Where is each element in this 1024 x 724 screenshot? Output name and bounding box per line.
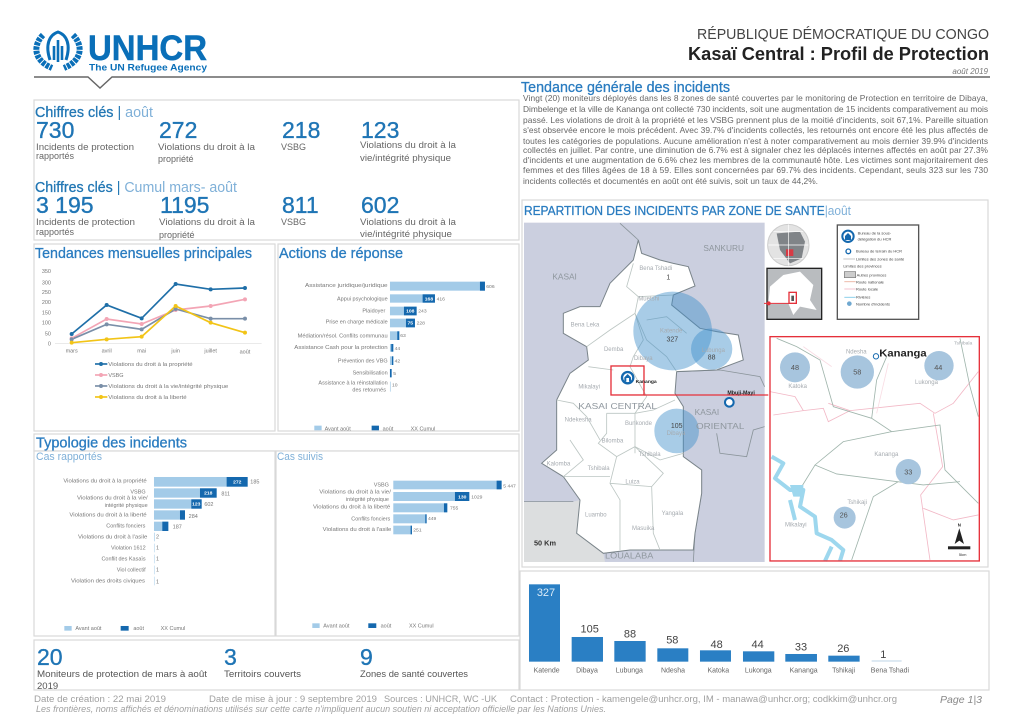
line chart: 50 bbox=[45, 331, 51, 337]
panel: incidents map bbox=[522, 200, 988, 567]
logo: UNHCR bbox=[36, 29, 208, 74]
map place labels: Luiza bbox=[625, 480, 640, 486]
bar chart: reported cases: Violation des droits civiques bbox=[71, 579, 145, 585]
icon: Mbuji-Mayi field office bbox=[725, 398, 734, 407]
bar chart: reported cases: 1 bbox=[156, 568, 159, 574]
stat: cumulative VSBG: VSBG bbox=[281, 217, 306, 227]
stat: life violations: Violations du droit à la bbox=[360, 140, 456, 150]
map legend: Autres provinces bbox=[857, 272, 886, 277]
stat: cumulative incidents bbox=[36, 192, 135, 237]
header title block: Kasaï Central : Profil de Protection bbox=[688, 43, 989, 64]
bar chart: followed cases: Violations du droit à l'asile bbox=[323, 527, 391, 533]
bar chart: response actions: 63 bbox=[400, 333, 406, 339]
bar chart: reported cases: 1 bbox=[156, 557, 159, 563]
stat: monitors bbox=[37, 644, 207, 692]
map place labels: Dibaya bbox=[667, 431, 686, 437]
stat: life violations: vie/intégrité physique bbox=[360, 153, 451, 163]
bar categories: Katende bbox=[534, 667, 560, 674]
bar chart: followed cases: 755 bbox=[450, 506, 459, 512]
stat: monitors: Moniteurs de protection de mars à août bbox=[37, 669, 207, 680]
stat: incidents: rapportés bbox=[36, 151, 75, 161]
bar chart: reported cases: Violations du droit à l'asile bbox=[78, 535, 147, 541]
map place labels: Katende bbox=[660, 328, 683, 334]
bar chart: response actions bbox=[294, 282, 495, 394]
bar chart: response actions: 44 bbox=[395, 346, 400, 352]
legend: response actions: août bbox=[383, 426, 394, 432]
stat: cumulative property: Violations du droit à la bbox=[159, 217, 255, 227]
map legend: Route locale bbox=[856, 287, 879, 292]
inset incident circles bbox=[780, 351, 954, 529]
page number: Page 1|3 bbox=[940, 694, 982, 706]
bar chart: reported cases: Viol collectif bbox=[117, 567, 146, 573]
incident counts: 88 bbox=[708, 355, 716, 362]
bar chart: followed cases: 130 bbox=[458, 494, 467, 500]
general trend paragraph: d'incidents et une augmentation de 6.6% chez les membres de la communauté hôte. Les victimes sont majoritairement des bbox=[523, 155, 988, 165]
map province labels: KASAI bbox=[695, 407, 719, 417]
map place labels: Lubunga bbox=[702, 348, 726, 354]
legend: reported cases: XX Cumul bbox=[161, 626, 185, 632]
general trend paragraph: Dimbelenge et la ville de Kananga ont collecté 730 incidents, soit une augmentation de 15 incidents comparativement au mois bbox=[523, 104, 988, 114]
heading: map: REPARTITION DES INCIDENTS PAR ZONE DE SANTE|août bbox=[524, 203, 851, 218]
legend: reported cases bbox=[64, 626, 185, 632]
bar chart: reported cases: 284 bbox=[189, 514, 198, 520]
stat: property violations: propriété bbox=[158, 154, 194, 164]
panel: response actions bbox=[278, 244, 519, 432]
map place labels: Kalomba bbox=[547, 461, 571, 467]
panel: incident typology bbox=[34, 434, 519, 636]
bar chart: reported cases: Conflit des Kasaïs bbox=[101, 556, 146, 562]
incident counts: 1 bbox=[666, 274, 670, 281]
general trend heading: Tendance générale des incidents bbox=[521, 79, 730, 96]
panel: key figures bbox=[34, 100, 519, 240]
bar chart: followed cases: Conflits fonciers bbox=[351, 516, 391, 522]
legend: response actions: Avant août bbox=[325, 426, 351, 432]
province: Kasaï Central bbox=[542, 240, 743, 553]
footer sources bbox=[34, 694, 897, 704]
general trend paragraph: passé. Les violations de droit à la propriété et les VSBG prennent plus de la moitié d'incidents, soit 67,1%. Pareille situation bbox=[523, 115, 988, 125]
inset counts: 48 bbox=[791, 363, 799, 372]
bar chart: response actions: Sensibilisation bbox=[353, 371, 388, 377]
header rule with pointer bbox=[34, 77, 990, 88]
inset place labels: Kananga bbox=[874, 452, 899, 458]
bar categories: Ndesha bbox=[661, 667, 685, 674]
bar values: 58 bbox=[666, 634, 678, 646]
bar categories: Bena Tshadi bbox=[871, 667, 910, 674]
heading: response actions: Actions de réponse bbox=[279, 246, 403, 262]
line chart: 200 bbox=[42, 300, 51, 306]
footer disclaimer: Les frontières, noms affichés et dénominations utilisés sur cette carte n'impliquent aucun soutien ni acceptation officielle par les Nations Unies. bbox=[36, 704, 606, 714]
bar chart: response actions: Assistance Cash pour la protection bbox=[294, 345, 388, 351]
bar chart: response actions: 606 bbox=[486, 284, 495, 290]
stat: health zones bbox=[360, 644, 468, 680]
inset counts bbox=[791, 363, 942, 520]
bar categories: Lubunga bbox=[616, 667, 643, 674]
footer sources: Date de mise à jour : 9 septembre 2019 bbox=[209, 694, 377, 704]
stat: incidents: Incidents de protection bbox=[36, 142, 134, 152]
bar chart: reported cases: 185 bbox=[250, 480, 259, 486]
stat: cumulative life: vie/intégrité physique bbox=[360, 229, 452, 239]
line chart: 300 bbox=[42, 280, 51, 286]
stat: cumulative incidents: 3 195 bbox=[36, 192, 94, 218]
map legend: délégation du HCR bbox=[858, 236, 891, 241]
scale label: 50 Km bbox=[534, 538, 556, 547]
subheading: followed cases: Cas suivis bbox=[277, 451, 323, 463]
legend: response actions bbox=[314, 426, 435, 432]
map legend: Rivières bbox=[856, 295, 870, 300]
bar chart: response actions: des retournés bbox=[352, 388, 386, 394]
bar chart: reported cases bbox=[63, 477, 259, 586]
stat: cumulative life: Violations du droit à la bbox=[360, 217, 456, 227]
bar values: 327 bbox=[537, 587, 555, 599]
bar chart: reported cases: Violations du droit à la propriété bbox=[63, 478, 147, 484]
legend: response actions: XX Cumul bbox=[411, 426, 435, 432]
bar values bbox=[537, 587, 886, 661]
chart legend: Violations du droit à la propriété bbox=[108, 362, 193, 368]
general trend paragraph: collectés en juillet. Par contre, une diminution de 6.7% est à signaler chez les déplacés internes affectés en août par 27.3% bbox=[523, 145, 989, 155]
bar chart: response actions: Prise en charge médicale bbox=[326, 320, 388, 326]
header title block bbox=[688, 26, 989, 76]
general trend paragraph: s'est observée encore le mois précédent. Avec 39.7% d'incidents collectés, les retournés ont encore été les plus affectés de bbox=[523, 125, 988, 135]
stat: monitors: 20 bbox=[37, 644, 63, 670]
bar categories: Dibaya bbox=[576, 667, 598, 674]
icon: north arrow and scale: 5km bbox=[959, 552, 967, 557]
stat: property violations: 272 bbox=[159, 117, 197, 143]
bar chart: reported cases: 1 bbox=[156, 546, 159, 552]
bar chart: reported cases: 2 bbox=[156, 535, 159, 541]
map province labels: KASAI bbox=[552, 272, 577, 282]
stat: cumulative life: 602 bbox=[361, 192, 399, 218]
bar chart: reported cases: 272 bbox=[233, 480, 242, 486]
line chart bbox=[42, 269, 262, 356]
map place labels: Luambo bbox=[585, 513, 607, 519]
bar chart: response actions: 416 bbox=[437, 296, 445, 302]
Kananga inset map bbox=[770, 337, 979, 561]
header title block: RÉPUBLIQUE DÉMOCRATIQUE DU CONGO bbox=[697, 26, 989, 43]
inset counts: 26 bbox=[840, 511, 848, 520]
map place labels: Bunkonde bbox=[625, 421, 653, 427]
map place labels: Mikalayi bbox=[578, 384, 600, 390]
stat: territories bbox=[224, 644, 301, 680]
bar chart: reported cases: Violation 1612 bbox=[111, 545, 146, 551]
bar chart: response actions: Appui psychologique bbox=[337, 296, 388, 302]
subheading: reported cases: Cas rapportés bbox=[36, 451, 102, 463]
footer sources: Date de création : 22 mai 2019 bbox=[34, 694, 166, 704]
stat: cumulative VSBG: 811 bbox=[282, 192, 319, 218]
chart legend: Violations du droit à la vie/intégrité physique bbox=[108, 384, 228, 390]
stat: life violations: 123 bbox=[361, 117, 399, 143]
line chart: 100 bbox=[42, 320, 51, 326]
bar chart: response actions: Assistance à la réinstallation bbox=[318, 380, 388, 386]
map legend: Bureau de terrain du HCR bbox=[856, 249, 902, 254]
map place labels: Bena Tshadi bbox=[639, 266, 672, 272]
line chart: mars bbox=[66, 349, 78, 355]
bar values: 33 bbox=[795, 642, 807, 654]
bar chart: reported cases: Violations du droit à la liberté bbox=[69, 513, 147, 519]
inset place labels: Tshikaji bbox=[847, 500, 867, 506]
map legend: Limites des zones de santé bbox=[856, 256, 905, 261]
line chart: 350 bbox=[42, 269, 51, 275]
general trend paragraph bbox=[523, 93, 989, 186]
bar chart: followed cases: 5 447 bbox=[503, 483, 516, 489]
bar chart: reported cases: intégrité physique bbox=[105, 503, 148, 509]
heading: key figures August: Chiffres clés | août bbox=[35, 104, 154, 121]
icon: globe bbox=[768, 224, 809, 266]
legend: reported cases: Avant août bbox=[75, 626, 102, 632]
map place labels: Bena Leka bbox=[571, 322, 600, 328]
line chart: 150 bbox=[42, 311, 51, 317]
general trend paragraph: toutes les catégories de populations. Aucune amélioration n'est à noter comparativement au mois dernier 39.9% d'incidents bbox=[523, 136, 988, 146]
bar categories: Lukonga bbox=[745, 667, 772, 674]
map place labels: Tshibala bbox=[588, 466, 610, 472]
bar chart: response actions: 75 bbox=[408, 321, 413, 327]
incident counts bbox=[666, 274, 716, 430]
stat: incidents: 730 bbox=[36, 117, 74, 143]
line chart: août bbox=[240, 350, 251, 356]
bar categories: Katoka bbox=[707, 667, 729, 674]
general trend paragraph: Vingt (20) moniteurs déployés dans les 8 zones de santé couvertes par le monitoring de Protection en territoire de Dibaya, bbox=[523, 93, 988, 103]
bar values: 1 bbox=[880, 649, 886, 661]
stat: VSBG: VSBG bbox=[281, 142, 306, 152]
map place labels: Masuika bbox=[632, 526, 655, 532]
stat: monitors: 2019 bbox=[37, 681, 58, 692]
map province labels bbox=[552, 243, 745, 560]
incident counts: 105 bbox=[671, 423, 683, 430]
map legend: Route nationale bbox=[856, 279, 885, 284]
map place labels: Demba bbox=[604, 347, 624, 353]
map legend bbox=[837, 225, 919, 319]
bar chart: followed cases: 251 bbox=[413, 528, 422, 534]
icon: north arrow and scale bbox=[948, 523, 970, 557]
map place labels: Tshibala bbox=[639, 452, 661, 458]
panel: monthly trends bbox=[34, 244, 275, 431]
locator globe and inset bbox=[764, 224, 979, 561]
bar values: 26 bbox=[837, 643, 849, 655]
inset label: Kananga: Kananga bbox=[879, 349, 927, 360]
stat: health zones: 9 bbox=[360, 644, 373, 670]
header title block: août 2019 bbox=[952, 67, 989, 76]
bar chart: reported cases: 187 bbox=[173, 525, 182, 531]
stat: territories: Territoirs couverts bbox=[224, 669, 301, 680]
bar chart: response actions: Plaidoyer bbox=[362, 308, 385, 314]
logo: UNHCR: UNHCR bbox=[88, 29, 207, 68]
bar values: 48 bbox=[711, 639, 723, 651]
legend: followed cases: août bbox=[381, 624, 392, 630]
inset counts: 44 bbox=[934, 363, 942, 372]
bar chart: response actions: 5 bbox=[393, 371, 396, 377]
map legend: Nombre d'incidents bbox=[856, 301, 890, 306]
map place labels bbox=[547, 266, 726, 532]
icon: north arrow and scale: N bbox=[958, 523, 961, 528]
stat: cumulative incidents: Incidents de protection bbox=[36, 217, 135, 227]
Kananga zoom frame and connector bbox=[611, 366, 768, 395]
bar chart: reported cases: Conflits fonciers bbox=[106, 524, 146, 530]
map place labels: Ndekesha bbox=[565, 418, 592, 424]
bar chart: followed cases: Violations du droit à la vie/ bbox=[319, 490, 391, 496]
panel: coverage figures bbox=[34, 640, 519, 692]
footer sources: Contact : Protection - kamengele@unhcr.org, IM - manawa@unhcr.org; codkkim@unhcr.org bbox=[510, 694, 897, 704]
stat: property violations: Violations du droit à la bbox=[158, 142, 255, 152]
inset place labels bbox=[785, 340, 972, 528]
bars bbox=[529, 584, 902, 662]
heading: key figures cumulative: Chiffres clés | Cumul mars- août bbox=[35, 179, 238, 196]
map legend: Limites des provinces bbox=[843, 264, 882, 269]
bar chart: reported cases: Violations du droit à la vie/ bbox=[77, 496, 148, 502]
bar chart: followed cases bbox=[313, 481, 516, 534]
legend: followed cases: Avant août bbox=[323, 624, 350, 630]
bar chart: response actions: 228 bbox=[417, 321, 425, 327]
stat: health zones: Zones de santé couvertes bbox=[360, 669, 468, 680]
bar chart: followed cases: 1029 bbox=[471, 495, 483, 501]
bar categories bbox=[534, 667, 910, 674]
stat: territories: 3 bbox=[224, 644, 237, 670]
inset place labels: Ndesha bbox=[846, 349, 867, 355]
chart legend: VSBG bbox=[108, 373, 124, 379]
inset counts: 58 bbox=[853, 368, 861, 377]
legend: followed cases: XX Cumul bbox=[409, 624, 434, 630]
bar chart: response actions: Assistance juridique/juridique bbox=[305, 283, 388, 289]
footer sources: Sources : UNHCR, WC -UK bbox=[384, 694, 497, 704]
label: Mbuji-Mayi: Mbuji-Mayi bbox=[727, 390, 755, 396]
line chart: avril bbox=[102, 349, 112, 355]
line chart: 250 bbox=[42, 290, 51, 296]
incident counts: 327 bbox=[666, 337, 678, 344]
inset counts: 33 bbox=[904, 467, 912, 476]
incident circles bbox=[633, 292, 732, 453]
inset place labels: Mikalayi bbox=[785, 522, 807, 528]
bar chart: followed cases: Violations du droit à la liberté bbox=[313, 504, 390, 510]
heading: monthly trends: Tendances mensuelles principales bbox=[35, 246, 252, 262]
bar chart: response actions: 243 bbox=[418, 308, 427, 314]
logo: UNHCR: The UN Refugee Agency bbox=[89, 62, 208, 74]
map place labels: Dibaya bbox=[634, 356, 653, 362]
inset place labels: Tshibala bbox=[954, 340, 972, 346]
chart legend: Violations du droit à la liberté bbox=[108, 395, 187, 401]
map province labels: ORIENTAL bbox=[696, 421, 745, 431]
stat: cumulative incidents: rapportés bbox=[36, 227, 75, 237]
stat: incidents bbox=[36, 117, 134, 161]
inset place labels: Lukonga bbox=[915, 380, 939, 386]
chart legend bbox=[95, 362, 228, 401]
icon: UNHCR office bbox=[622, 372, 633, 383]
map legend: Bureau de la sous- bbox=[858, 230, 892, 235]
map province labels: KASAI CENTRAL bbox=[578, 401, 657, 411]
bar chart: reported cases: 1 bbox=[156, 580, 159, 586]
legend: followed cases bbox=[312, 623, 434, 630]
stat: cumulative life bbox=[360, 192, 456, 239]
general trend paragraph: incidents collectés et documentés en août ont été suivis, soit un taux de 44,2%. bbox=[523, 176, 818, 186]
line chart: mai bbox=[137, 349, 146, 355]
bar values: 88 bbox=[624, 628, 636, 640]
label: Kananga: Kananga bbox=[636, 379, 657, 385]
map place labels: Bilomba bbox=[602, 439, 624, 445]
bar values: 105 bbox=[580, 623, 599, 635]
line chart: 0 bbox=[48, 341, 51, 347]
stat: life violations bbox=[360, 117, 456, 163]
stat: cumulative property bbox=[159, 192, 255, 240]
map place labels: Muetshi bbox=[638, 297, 659, 303]
bar chart: reported cases: 811 bbox=[221, 491, 230, 497]
main map bbox=[524, 223, 768, 562]
bar chart: followed cases: intégrité physique bbox=[346, 497, 389, 503]
bar chart: response actions: Médiation/résol. Conflits communau bbox=[298, 334, 388, 340]
panel: followed cases bbox=[276, 451, 519, 636]
panel: incidents by health zone bar chart bbox=[520, 571, 989, 690]
bar categories: Tshikaji bbox=[832, 667, 856, 674]
line chart: juin bbox=[170, 349, 180, 355]
bar chart: reported cases: 602 bbox=[204, 502, 213, 508]
map province labels: SANKURU bbox=[703, 243, 744, 253]
stat: cumulative property: 1195 bbox=[160, 192, 209, 218]
stat: VSBG: 218 bbox=[282, 117, 320, 143]
stat: cumulative property: propriété bbox=[159, 230, 195, 240]
general trend paragraph: femmes et des filles âgées de 18 à 59. Elles sont concernées par 69.7% des incidents. Cependant, seuls 323 sur les 730 bbox=[523, 165, 988, 175]
map province labels: LOUALABA bbox=[605, 550, 654, 560]
bar chart: response actions: 108 bbox=[406, 309, 415, 315]
bar chart: reported cases: 218 bbox=[204, 491, 213, 497]
line chart: juillet bbox=[203, 349, 217, 355]
map place labels: Yangala bbox=[662, 511, 684, 517]
bar chart: response actions: 42 bbox=[395, 358, 400, 364]
heading: incident typology: Typologie des incidents bbox=[36, 436, 187, 452]
bar chart: reported cases: 123 bbox=[192, 502, 201, 508]
panel: reported cases bbox=[34, 451, 275, 636]
DRC locator map bbox=[764, 268, 822, 319]
bar values: 44 bbox=[752, 639, 764, 651]
bar chart: response actions: 10 bbox=[392, 383, 398, 389]
stat: property violations bbox=[158, 117, 255, 164]
bar chart: reported cases: VSBG bbox=[130, 489, 146, 495]
bar categories: Kananga bbox=[790, 667, 818, 674]
bar chart: response actions: Prévention des VBG bbox=[338, 358, 388, 364]
icon: laurel wreath with sheltered figure bbox=[36, 32, 80, 68]
bar chart: response actions: 168 bbox=[425, 296, 433, 302]
inset place labels: Katoka bbox=[788, 384, 808, 390]
bar chart: followed cases: 449 bbox=[428, 516, 437, 522]
legend: reported cases: août bbox=[133, 626, 144, 632]
bar chart: followed cases: VSBG bbox=[374, 482, 389, 488]
